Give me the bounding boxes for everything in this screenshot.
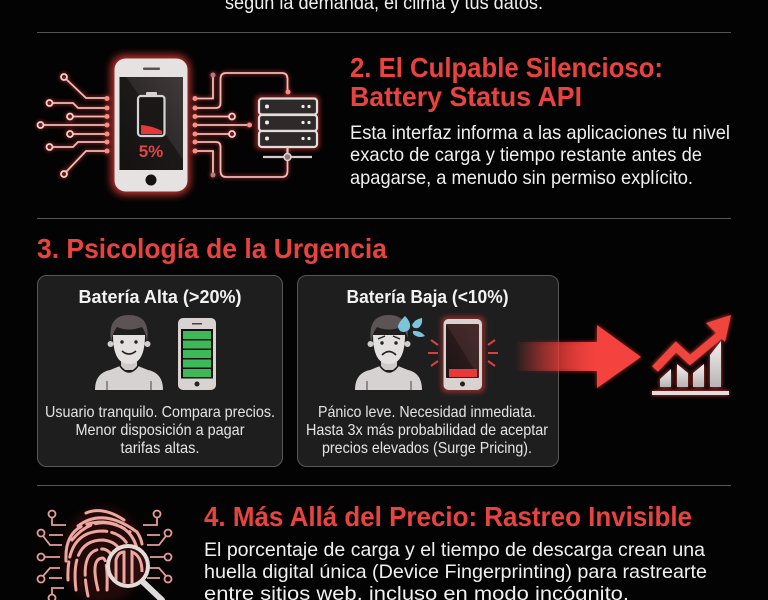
text: section 4 description: huella digital única (Device Fingerprinting) para rastrearte (204, 561, 707, 583)
magnifier (108, 546, 162, 600)
text: high battery description: Menor disposición a pagar (76, 422, 245, 439)
panel: low battery card (298, 276, 558, 466)
text: high battery description: tarifas altas. (120, 440, 200, 457)
text: low battery description: Hasta 3x más probabilidad de aceptar (306, 422, 549, 439)
panel: high battery card (38, 276, 282, 466)
phone body (114, 58, 188, 192)
icon: phone full green battery (178, 318, 216, 390)
text: battery percentage: 5% (139, 142, 163, 161)
icon: fingerprint with magnifier (38, 507, 172, 600)
icon: calm person (95, 315, 163, 390)
panel: section 3 urgency psychology (37, 233, 731, 466)
panel: section 4 invisible tracking (38, 501, 707, 600)
icon: sweat drops (398, 316, 425, 337)
left circuit traces (38, 74, 110, 177)
heading: section 3: 3. Psicología de la Urgencia (37, 233, 387, 264)
text: section 4 description: El porcentaje de carga y el tiempo de descarga crean una (204, 539, 705, 561)
text: high battery description: Usuario tranquilo. Compara precios. (45, 404, 275, 421)
heading: section 4: 4. Más Allá del Precio: Rastreo Invisible (204, 501, 692, 532)
fingerprint ridges (66, 511, 142, 596)
text: section 2 description: exacto de carga y tiempo restante antes de (350, 144, 702, 166)
heading: section 2: Battery Status API (350, 81, 582, 112)
phone glow (111, 55, 190, 195)
arrow: low battery leads to higher prices (515, 325, 641, 388)
icon: server stack (255, 95, 320, 160)
panel: section 2 Battery Status API (38, 52, 730, 195)
text: section 2 description: Esta interfaz informa a las aplicaciones tu nivel (350, 122, 730, 144)
icon: rising price chart (652, 315, 731, 395)
icon: worried person (355, 315, 425, 390)
text: low battery description: Pánico leve. Necesidad inmediata. (318, 404, 536, 421)
circuit nodes around fingerprint (38, 510, 172, 600)
text: high battery title: Batería Alta (>20%) (78, 286, 242, 307)
text: section 2 description: apagarse, a menudo sin permiso explícito. (350, 167, 693, 189)
text: low battery title: Batería Baja (<10%) (346, 286, 508, 307)
icon: phone low battery with alert rays (428, 316, 498, 393)
heading: section 2: 2. El Culpable Silencioso: (350, 52, 663, 83)
text: low battery description: precios elevados (Surge Pricing). (322, 440, 532, 457)
icon: phone connected to server (38, 55, 320, 195)
right circuit traces (192, 72, 290, 178)
